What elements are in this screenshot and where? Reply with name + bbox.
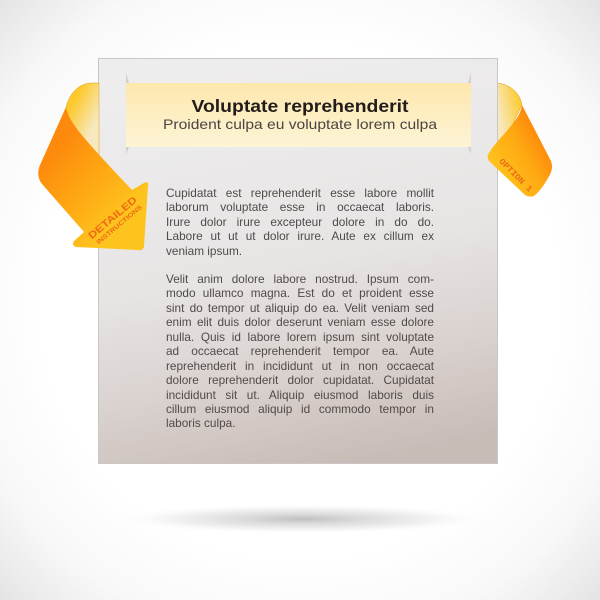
title: Voluptate reprehenderit [192,96,409,116]
right tab [488,105,552,197]
right tab fold [497,83,522,146]
text block: first paragraph: Irure dolor irure excepteur dolore in do do. [166,215,434,229]
left arrow label [87,195,144,246]
band slot tips [126,73,471,154]
text block: second paragraph: sint do tempor ut aliquip do ea. Velit veniam sed [166,301,434,315]
left arrow [38,107,148,250]
text block: second paragraph: reprehenderit in incididunt ut in non occaecat [166,359,434,373]
left fold [66,83,99,156]
right tab body [488,105,552,197]
left arrow label: DETAILED [87,195,140,242]
text block: second paragraph: ad occaecat reprehenderit tempor ea. Aute [166,344,434,358]
text block: second paragraph: modo ullamco magna. Est do et proident esse [166,286,434,300]
floor shadow [112,504,492,534]
heading band [126,83,471,147]
text block: first paragraph: Cupidatat est reprehenderit esse labore mollit [166,186,434,200]
text block: second paragraph: nulla. Quis id labore lorem ipsum sint voluptate [166,330,434,344]
text block: second paragraph: incididunt sit ut. Aliquip eiusmod laboris duis [166,388,434,402]
text block: second paragraph: cillum eiusmod aliquip id commodo tempor in [166,402,434,416]
subtitle: Proident culpa eu voluptate lorem culpa [163,116,437,132]
panel: paper card [98,58,498,464]
text block: first paragraph: Labore ut ut ut dolor irure. Aute ex cillum ex [166,229,434,243]
right tab label: OPTION 1 [497,157,534,194]
text block: first paragraph: laborum voluptate esse in occaecat laboris. [166,200,434,214]
text block: second paragraph: enim elit duis dolor deserunt veniam esse dolore [166,315,434,329]
left arrow label: INSTRUCTIONS [95,204,144,246]
text block: first paragraph [166,186,434,258]
text block: second paragraph: laboris culpa. [166,416,236,430]
text block: second paragraph: Velit anim dolore labore nostrud. Ipsum com- [166,272,434,286]
text block: second paragraph: dolore reprehenderit dolor cupidatat. Cupidatat [166,373,434,387]
text block: first paragraph: veniam ipsum. [166,244,242,258]
left arrow body [38,107,148,250]
text block: second paragraph [166,272,434,430]
